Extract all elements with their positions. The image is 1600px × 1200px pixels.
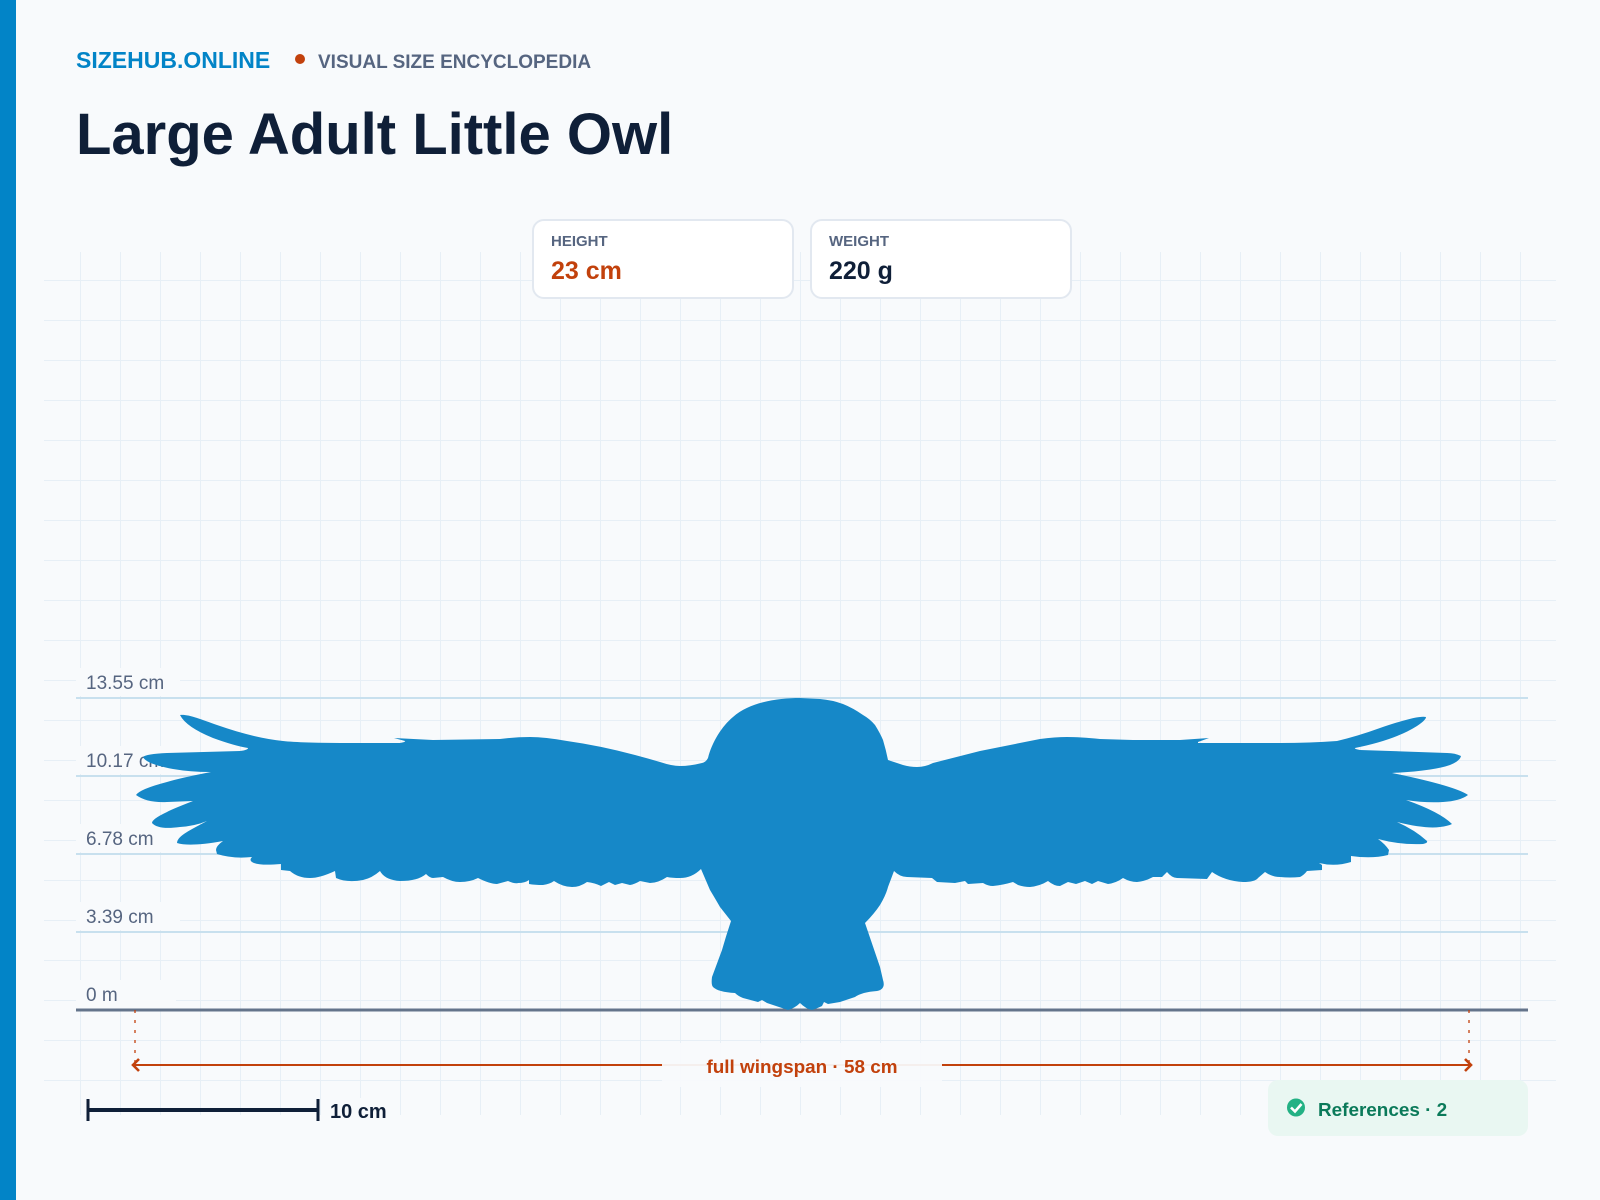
scale bar bbox=[86, 1098, 396, 1123]
title: Large Adult Little Owl bbox=[76, 102, 673, 167]
card: weight bbox=[811, 220, 1071, 298]
header bbox=[76, 47, 591, 73]
wingspan dimension: full wingspan · 58 cm bbox=[706, 1057, 898, 1078]
card: height: HEIGHT bbox=[551, 233, 608, 250]
scale bar: 10 cm bbox=[330, 1101, 387, 1123]
card: weight: 220 g bbox=[829, 257, 893, 285]
height scale lines and labels bbox=[76, 668, 1528, 1012]
wingspan arrow bbox=[134, 1064, 1470, 1066]
separator dot bbox=[295, 54, 305, 64]
references badge bbox=[1268, 1080, 1528, 1136]
owl silhouette bbox=[136, 698, 1468, 1010]
card: height bbox=[533, 220, 793, 298]
left accent bar bbox=[0, 0, 16, 1200]
brand name: SIZEHUB.ONLINE bbox=[76, 47, 270, 73]
height scale lines and labels: 10.17 cm bbox=[86, 751, 164, 772]
tagline: VISUAL SIZE ENCYCLOPEDIA bbox=[318, 52, 591, 73]
references badge: References · 2 bbox=[1318, 1100, 1447, 1121]
height scale lines and labels: 13.55 cm bbox=[86, 673, 164, 694]
wingspan guides bbox=[134, 1010, 136, 1062]
wingspan dimension bbox=[133, 1010, 1471, 1087]
card: height: 23 cm bbox=[551, 257, 622, 285]
height scale lines and labels: 0 m bbox=[86, 985, 118, 1006]
icon: check bbox=[1287, 1098, 1305, 1116]
height scale lines and labels: 6.78 cm bbox=[86, 829, 154, 850]
card: weight: WEIGHT bbox=[829, 233, 889, 250]
measurement grid bbox=[44, 252, 1556, 1115]
height scale lines and labels: 3.39 cm bbox=[86, 907, 154, 928]
wingspan label bbox=[662, 1043, 942, 1087]
